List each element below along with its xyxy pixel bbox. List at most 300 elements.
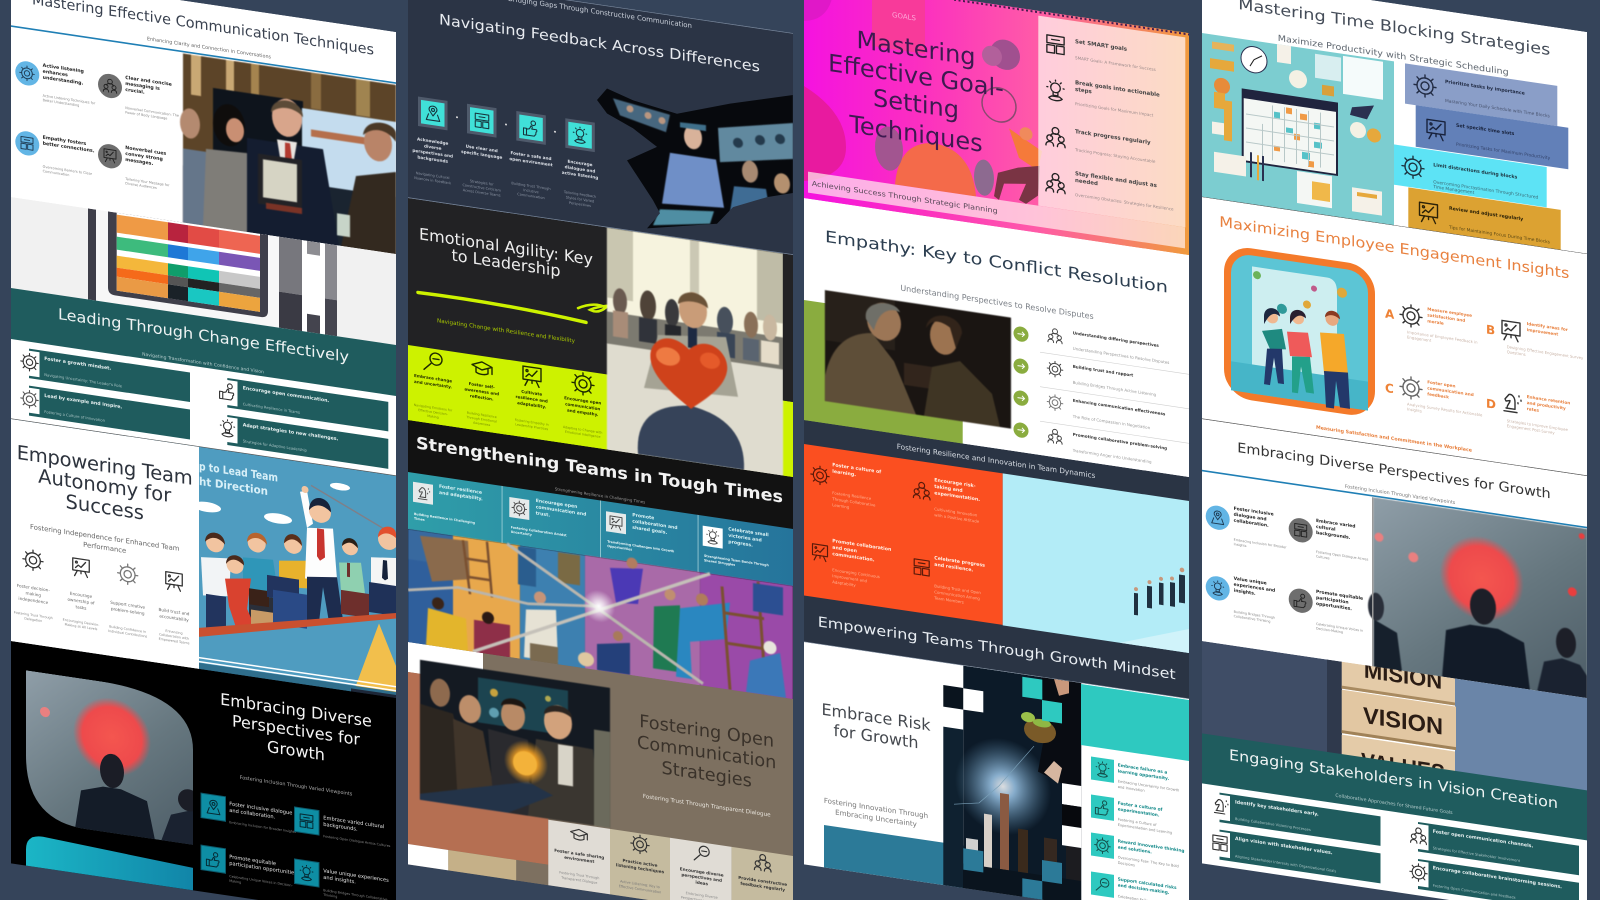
item: collaboration: Adaptability bbox=[832, 579, 856, 588]
list row: trust and rapport: Building Bridges Through Active Listening bbox=[1073, 380, 1157, 397]
subtitle: embrace risk: Fostering Innovation Through bbox=[824, 796, 928, 820]
item: self-awareness: Building Resilience bbox=[467, 411, 497, 419]
tip: communication: Fostering Collaboration Amidst bbox=[511, 525, 567, 538]
item: self-awareness: reflection. bbox=[470, 393, 494, 402]
item: decision making: Delegation bbox=[24, 616, 42, 623]
card: lead by example: Fostering a Culture of Innovation bbox=[44, 410, 106, 423]
item: trust and accountability: Enhancing bbox=[165, 629, 183, 635]
item: risk-taking: Cultivating Innovation bbox=[934, 506, 978, 518]
photo: businessperson, plant and city of coins bbox=[943, 663, 1081, 900]
item: culture of learning bbox=[811, 459, 882, 515]
tip: communication: trust. bbox=[536, 511, 550, 519]
item: trust and accountability bbox=[159, 571, 190, 645]
photo: award handover bbox=[180, 53, 396, 255]
list row: communication effectiveness: The Role of Compassion in Negotiation bbox=[1072, 414, 1151, 430]
item: cultural backgrounds: backgrounds. bbox=[323, 822, 358, 833]
subtitle: communication: Enhancing Clarity and Connection in Conversations bbox=[147, 36, 272, 61]
illustration: goal-setting scene bbox=[804, 0, 1042, 216]
slide: Embrace Risk for Growth bbox=[804, 642, 1189, 900]
item: unique experiences light: experiences and bbox=[1234, 582, 1275, 594]
item: varied backgrounds light: Cultures bbox=[1316, 554, 1330, 560]
item: trust and accountability: Build trust and bbox=[159, 607, 190, 616]
slide: Mastering Time Blocking Strategies bbox=[1202, 0, 1587, 255]
item: equitable participation light bbox=[1289, 585, 1363, 637]
step: dialogue: Encourage bbox=[568, 159, 593, 167]
list row: trust and rapport: Building trust and rapport bbox=[1073, 364, 1133, 378]
item: track progress: Track progress regularly bbox=[1075, 129, 1151, 146]
item: clear messaging: messaging is bbox=[125, 81, 160, 92]
item: track progress bbox=[1046, 125, 1156, 164]
card: growth mindset: Navigating Uncertainty: The Leader's Role bbox=[44, 373, 123, 389]
item: unique experiences bbox=[294, 859, 389, 900]
card: communication channels: Strategies for Effective Stakeholder Involvement bbox=[1433, 846, 1521, 863]
item: risk-taking: taking and bbox=[934, 484, 963, 494]
title: engaging stakeholders: Engaging Stakeholders in Vision Creation bbox=[1229, 747, 1558, 812]
card: brainstorming: Encourage collaborative brainstorming sessions. bbox=[1433, 865, 1562, 890]
item: culture of experimentation: experimentation. bbox=[1118, 806, 1160, 819]
item D: retention: Engagement Post-Survey bbox=[1507, 423, 1555, 435]
step: clear language bbox=[461, 103, 502, 198]
panel: active listening: Practice active bbox=[622, 858, 658, 868]
item: nonverbal cues: Tailoring Your Message for bbox=[124, 177, 170, 188]
item: embrace change: Effective Decision- bbox=[418, 408, 448, 416]
photo: man holding heart bbox=[607, 227, 783, 476]
panel: diverse perspectives: ideas bbox=[695, 880, 708, 886]
item: problem solving: problem-solving bbox=[111, 606, 145, 616]
subtitle: employee engagement: Measuring Satisfaction and Commitment in the Workplace bbox=[1316, 425, 1472, 454]
slide: Maximizing Employee Engagement Insights bbox=[1202, 197, 1587, 477]
tip: communication bbox=[509, 494, 586, 545]
item: unique experiences light bbox=[1206, 572, 1275, 624]
item: decision making: Fostering Trust Through bbox=[14, 610, 53, 620]
tip: celebrate bbox=[703, 523, 769, 572]
item: empathy: Overcoming Barriers to Clear bbox=[43, 165, 93, 176]
bar: limit distractions: Overcoming Procrastination Through Structured bbox=[1433, 179, 1539, 201]
item: stay flexible: Overcoming Obstacles: Strategies for Resilience bbox=[1075, 192, 1174, 212]
card: adapt strategies: Strategies for Adaptive Leadership bbox=[243, 439, 308, 453]
item: embrace change bbox=[414, 350, 453, 422]
item D: retention: and productivity bbox=[1527, 400, 1566, 411]
image: small team on pale blue bbox=[1003, 473, 1189, 653]
item: inclusive dialogue light: collaboration. bbox=[1234, 518, 1269, 529]
item: stay flexible: Stay flexible and adjust as bbox=[1075, 171, 1158, 189]
slide: Empowering Team Autonomy for Success bbox=[11, 419, 398, 699]
panel: safe sharing bbox=[548, 820, 610, 895]
slide: Fostering Open Communication Strategies bbox=[408, 642, 794, 900]
white text panel bbox=[11, 419, 199, 670]
title: goal-setting: Mastering bbox=[856, 26, 976, 71]
item B: improvement: Designing Effective Engagement Survey bbox=[1507, 344, 1584, 361]
item: empathy bbox=[15, 131, 94, 176]
item: unique experiences: Value unique experiences bbox=[323, 868, 389, 884]
item: problem solving bbox=[108, 561, 148, 639]
item: inclusive dialogue light bbox=[1206, 502, 1287, 554]
tip: celebrate: Strengthening Team Bonds Through bbox=[704, 554, 769, 567]
item: problem solving: Building Confidence in bbox=[109, 625, 146, 634]
item: unique experiences: Thinking bbox=[322, 893, 337, 899]
item C: communication bbox=[1385, 373, 1483, 423]
image: mission vision values blocks bbox=[1202, 634, 1587, 807]
slide: Mastering Effective Goal-Setting Techniques bbox=[804, 0, 1189, 256]
title: navigating feedback: Navigating Feedback Across Differences bbox=[439, 11, 760, 76]
card: lead by example bbox=[20, 384, 190, 439]
item: active listening: understanding. bbox=[43, 75, 83, 87]
bar: prioritize tasks: Mastering Your Daily Schedule with Time Blocks bbox=[1445, 98, 1551, 120]
item: participation: participation opportunities. bbox=[229, 861, 299, 877]
teal bar bbox=[26, 834, 193, 891]
item: ownership of tasks: Encouraging Decision- bbox=[63, 618, 100, 627]
item: equitable participation light: opportunities. bbox=[1316, 601, 1352, 612]
brush stroke and arrow bbox=[418, 270, 634, 329]
item: open communication: and empathy. bbox=[567, 408, 599, 417]
subtitle: leading through change: Navigating Transformation with Confidence and Vision bbox=[142, 351, 264, 375]
item: inclusive dialogue light: Foster inclusive bbox=[1234, 506, 1274, 518]
item: resilience: Cultivate bbox=[521, 389, 542, 397]
list row: differing perspectives bbox=[1014, 322, 1169, 365]
item: decision making bbox=[14, 547, 53, 625]
item: decision making: Foster decision- bbox=[17, 583, 50, 593]
card: lead by example: Lead by example and inspire. bbox=[44, 393, 122, 410]
slide: Emotional Agility: Key to Leadership bbox=[408, 198, 793, 478]
card: adapt strategies bbox=[218, 414, 388, 469]
subtitle: team autonomy: Performance bbox=[83, 541, 126, 555]
tip: resilience: Building Resilience in Challenging bbox=[414, 512, 476, 525]
title: team autonomy: Success bbox=[65, 490, 144, 525]
step: safe environment bbox=[509, 110, 553, 201]
photo: red glowing brain bbox=[26, 670, 200, 847]
item: culture of learning: Fostering Resilience bbox=[832, 490, 872, 501]
item: collaboration: Promote collaboration bbox=[832, 538, 891, 553]
photo: team around light bulb bbox=[420, 660, 610, 828]
item: inclusive dialogue bbox=[201, 793, 296, 834]
panel: active listening: listening techniques bbox=[616, 862, 665, 874]
bar: time slots bbox=[1416, 105, 1568, 169]
panel: constructive feedback bbox=[732, 847, 794, 900]
item: reward innovation: Reward innovative thinking bbox=[1118, 838, 1184, 854]
bar: review and adjust bbox=[1408, 187, 1561, 251]
illustration: people on ladders bbox=[408, 524, 793, 700]
image: mission vision values blocks: VISION bbox=[1363, 702, 1443, 740]
item: culture of experimentation: Foster a culture of bbox=[1118, 800, 1163, 813]
tip: communication: Encourage open bbox=[536, 498, 577, 510]
list row: communication effectiveness: Enhancing communication effectiveness bbox=[1073, 398, 1166, 417]
main man bbox=[305, 528, 337, 579]
step: clear language: Across Diverse Teams bbox=[463, 188, 501, 198]
card: growth mindset: Foster a growth mindset. bbox=[44, 356, 111, 372]
item: clear messaging: crucial. bbox=[125, 87, 145, 96]
bar: prioritize tasks bbox=[1405, 63, 1557, 126]
item C: communication: Insights bbox=[1407, 406, 1422, 414]
step: clear language: Constructive Criticism bbox=[463, 183, 501, 193]
item: empathy: Communication bbox=[43, 169, 69, 177]
platform bbox=[199, 613, 396, 637]
title: employee engagement: Maximizing Employee Engagement Insights bbox=[1219, 214, 1569, 282]
item: nonverbal cues: Diverse Audiences bbox=[125, 181, 157, 190]
step: acknowledge perspectives: Acknowledge bbox=[417, 136, 449, 146]
bar: review and adjust: Review and adjust regularly bbox=[1449, 206, 1523, 223]
item: self-awareness: awareness and bbox=[464, 386, 499, 396]
item: collaboration: Encouraging Continuous bbox=[832, 567, 880, 579]
item: varied backgrounds light: Fostering Open Dialogue Across bbox=[1316, 550, 1369, 562]
item A: satisfaction: morale bbox=[1427, 318, 1444, 326]
tip: collaboration bbox=[606, 508, 678, 558]
item: trust and accountability: accountability bbox=[159, 613, 189, 623]
item: ownership of tasks: tasks bbox=[75, 604, 87, 611]
panel: safe sharing: Foster a safe sharing bbox=[554, 848, 604, 860]
item: problem solving: Support creative bbox=[110, 600, 146, 610]
item: equitable participation light: Promote equitable bbox=[1316, 589, 1363, 602]
step: clear language: Strategies for bbox=[470, 179, 494, 187]
item B: improvement: Questions bbox=[1507, 349, 1526, 357]
item: risk-taking: Encourage risk- bbox=[934, 477, 976, 489]
item: reward innovation: and solutions. bbox=[1118, 844, 1152, 856]
item: SMART goals: SMART Goals: A Framework for Success bbox=[1075, 55, 1156, 72]
step: acknowledge perspectives: backgrounds bbox=[417, 154, 448, 164]
step: safe environment: open environment bbox=[509, 156, 553, 167]
item: collaboration: communication. bbox=[832, 551, 875, 563]
step: safe environment: Foster a safe and bbox=[510, 150, 552, 161]
item: clear messaging: Power of Body Language bbox=[125, 110, 167, 121]
card: open communication: Cultivating Resilience in Teams bbox=[243, 402, 300, 415]
item: culture of learning: Through Collaborative bbox=[831, 496, 876, 508]
subtitle: empathy: Understanding Perspectives to Resolve Disputes bbox=[900, 284, 1094, 321]
panel: active listening bbox=[610, 829, 670, 900]
step: dialogue bbox=[562, 118, 598, 209]
item B: improvement: improvement bbox=[1527, 327, 1558, 337]
item: resilience bbox=[515, 365, 549, 431]
tip: resilience: Times bbox=[414, 516, 425, 522]
item: actionable steps bbox=[1047, 76, 1160, 119]
column 1 of slides bbox=[11, 0, 398, 900]
item: varied backgrounds light bbox=[1289, 514, 1369, 566]
tip: collaboration: Promote bbox=[632, 512, 654, 521]
middle woman bbox=[1287, 330, 1312, 359]
teal strip of four tips bbox=[408, 472, 793, 586]
step: dialogue: active listening bbox=[562, 170, 598, 180]
item A: satisfaction bbox=[1385, 300, 1478, 350]
item: collaboration: and open bbox=[832, 545, 857, 554]
item: calculated risks: and decision-making. bbox=[1118, 882, 1170, 896]
item: celebrate progress: Building Trust and Open bbox=[934, 583, 981, 595]
item C: communication: Foster open bbox=[1427, 379, 1455, 389]
bar: time slots: Set specific time slots bbox=[1456, 123, 1514, 137]
item: self-awareness: Awareness bbox=[473, 421, 491, 427]
item: participation: Celebrating Unique Voices in Decision- bbox=[229, 874, 293, 888]
tip: communication: Uncertainty bbox=[511, 530, 533, 537]
strip bbox=[808, 172, 1185, 248]
item: nonverbal cues: messages. bbox=[125, 158, 153, 167]
item C: communication: feedback bbox=[1427, 391, 1449, 400]
slide: Engaging Stakeholders in Vision Creation bbox=[1202, 634, 1587, 900]
step: acknowledge perspectives: diverse bbox=[424, 143, 442, 151]
item: open communication: Encourage open bbox=[564, 395, 601, 406]
card: align vision bbox=[1210, 828, 1380, 883]
item: culture of experimentation: Experimentation and Learning bbox=[1118, 823, 1172, 835]
bar: limit distractions: Limit distractions during blocks bbox=[1433, 162, 1517, 181]
title: team autonomy: Autonomy for bbox=[38, 465, 172, 507]
bar: prioritize tasks: Prioritize tasks by importance bbox=[1445, 79, 1525, 97]
bar: time slots: Prioritizing Tasks for Maximum Productivity bbox=[1456, 142, 1551, 162]
bar: review and adjust: Tips for Maintaining Focus During Time Blocks bbox=[1448, 224, 1551, 246]
item: open communication: Emotional Intelligence bbox=[565, 430, 601, 439]
man orange bbox=[1320, 330, 1348, 377]
title: embracing diverse dark: Growth bbox=[267, 737, 325, 764]
tip: celebrate: victories and bbox=[728, 533, 762, 544]
item: self-awareness bbox=[464, 359, 499, 428]
card: growth mindset bbox=[20, 347, 190, 402]
item: track progress: Tracking Progress: Staying Accountable bbox=[1074, 147, 1156, 164]
item: celebrate progress: Communication Among bbox=[934, 589, 980, 601]
item D: retention: Strategies to Improve Employee bbox=[1507, 418, 1569, 432]
card: align vision: Aligning Stakeholder Interests with Organizational Goals bbox=[1235, 854, 1336, 873]
item: active listening: enhances bbox=[43, 69, 68, 78]
step: dialogue: Tailoring Feedback bbox=[563, 190, 597, 199]
item: trust and accountability: Empowered Teams bbox=[159, 637, 190, 645]
item: embrace change: Navigating Emotions for bbox=[414, 403, 453, 413]
item: decision making: independence bbox=[18, 596, 49, 605]
item: clear messaging: Nonverbal Communication: The bbox=[125, 106, 179, 118]
cartoon: team on boat: ht Direction bbox=[199, 475, 268, 498]
item: trust and accountability: Collaboration with bbox=[159, 632, 189, 641]
cartoon: team on boat: p to Lead Team bbox=[199, 460, 278, 484]
item: varied backgrounds light: backgrounds. bbox=[1316, 530, 1351, 541]
tip: celebrate: Celebrate small bbox=[728, 526, 769, 538]
item: participation bbox=[201, 845, 299, 893]
card: communication channels bbox=[1409, 821, 1579, 875]
image: mission vision values blocks: MISION bbox=[1364, 657, 1442, 694]
item: self-awareness: Foster self- bbox=[469, 381, 495, 390]
card: brainstorming bbox=[1409, 858, 1579, 900]
slide: Empathy: Key to Conflict Resolution bbox=[804, 198, 1189, 478]
tip: resilience: and adaptability. bbox=[439, 490, 483, 502]
tip: collaboration: Transforming Challenges into Growth bbox=[607, 540, 675, 554]
item: active listening: Active listening bbox=[43, 63, 84, 75]
item: embrace failure: learning opportunity. bbox=[1118, 768, 1169, 782]
illustration: goal-setting scene: GOALS bbox=[892, 10, 916, 23]
bar: limit distractions bbox=[1394, 144, 1547, 207]
item: active listening: Better Understanding bbox=[43, 98, 79, 108]
item: inclusive dialogue: and collaboration. bbox=[229, 808, 276, 821]
title: embrace risk: for Growth bbox=[834, 721, 918, 752]
card: key stakeholders: Building Collaborative Visioning Processes bbox=[1235, 817, 1311, 832]
column 3 of slides bbox=[804, 0, 1189, 900]
slide: Embracing Diverse Perspectives for Growth (light) bbox=[1202, 419, 1587, 699]
title: growth mindset: Empowering Teams Through Growth Mindset bbox=[818, 614, 1176, 683]
image: tablet with colour bars bbox=[11, 197, 396, 345]
item: nonverbal cues bbox=[98, 144, 170, 189]
subtitle: fostering open communication: Fostering Trust Through Transparent Dialogue bbox=[643, 794, 771, 819]
card: key stakeholders: Identify key stakeholders early. bbox=[1235, 799, 1319, 818]
panel: diverse perspectives: Embracing Diverse bbox=[686, 891, 718, 900]
title: leading through change: Leading Through Change Effectively bbox=[58, 305, 349, 366]
item: empathy: better connections. bbox=[43, 141, 95, 154]
item: varied backgrounds light: cultural bbox=[1316, 524, 1336, 533]
cartoon: team on boat bbox=[193, 459, 398, 699]
item B: improvement bbox=[1486, 315, 1584, 366]
photo: audience facing red brain bbox=[1368, 497, 1587, 699]
item: calculated risks: Support calculated risks bbox=[1118, 876, 1177, 891]
item: celebrate progress: Team Members bbox=[933, 595, 964, 605]
item A: satisfaction: Importance of Employee Feedback in bbox=[1407, 329, 1478, 345]
card: brainstorming: Fostering Open Communication and Feedback bbox=[1433, 884, 1517, 900]
step: dialogue: dialogue and bbox=[565, 164, 595, 174]
subtitle: emotional agility: Navigating Change with Resilience and Flexibility bbox=[437, 318, 576, 345]
item: participation: Promote equitable bbox=[229, 854, 276, 867]
item D: retention: Enhance retention bbox=[1527, 394, 1570, 405]
item: equitable participation light: Celebrating Unique Voices in bbox=[1316, 622, 1363, 633]
item B: improvement: B bbox=[1486, 322, 1495, 338]
item: clear messaging bbox=[98, 71, 179, 122]
item: varied backgrounds light: Embrace varied bbox=[1316, 518, 1355, 530]
subtitle: goal-setting: Achieving Success Through Strategic Planning bbox=[812, 179, 998, 215]
item C: communication: communication and bbox=[1427, 385, 1474, 397]
title: fostering open communication: Strategies bbox=[662, 758, 752, 792]
item: celebrate progress: and resilience. bbox=[934, 562, 973, 574]
step: acknowledge perspectives: Navigating Cultural bbox=[416, 171, 450, 180]
subtitle: embracing diverse dark: Fostering Inclusion Through Varied Viewpoints bbox=[240, 775, 353, 798]
step: clear language: Use clear and bbox=[466, 144, 498, 153]
item A: satisfaction: Measure employee bbox=[1427, 306, 1472, 318]
step: dialogue: Styles for Varied bbox=[566, 195, 594, 204]
item: culture of learning: Foster a culture of bbox=[832, 462, 882, 476]
item: embrace failure: Embrace failure as a bbox=[1118, 762, 1167, 776]
item: embrace failure bbox=[1091, 756, 1179, 798]
card: open communication bbox=[218, 377, 388, 431]
item: active listening bbox=[15, 59, 96, 110]
item: risk-taking: with a Positive Attitude bbox=[934, 512, 980, 524]
item: reward innovation: Decisions bbox=[1118, 861, 1135, 867]
step: safe environment: Inclusive bbox=[523, 188, 539, 194]
tip: collaboration: shared goals. bbox=[632, 525, 667, 536]
item: decision making: making bbox=[26, 590, 41, 598]
card: open communication: Encourage open communication. bbox=[243, 385, 329, 404]
list row: trust and rapport bbox=[1014, 355, 1157, 397]
title: embracing diverse light: Embracing Diverse Perspectives for Growth bbox=[1237, 440, 1551, 502]
item: unique experiences light: Building Bridges Through bbox=[1234, 610, 1275, 620]
man teal bbox=[243, 558, 276, 598]
item: nonverbal cues: convey strong bbox=[125, 151, 163, 162]
lime band bbox=[408, 345, 793, 478]
item: equitable participation light: participation bbox=[1316, 595, 1349, 606]
list row: communication effectiveness bbox=[1014, 389, 1166, 433]
item: equitable participation light: Decision-Making bbox=[1316, 626, 1343, 634]
subtitle: team autonomy: Fostering Independence for Enhanced Team bbox=[30, 523, 180, 553]
item: participation: Making bbox=[229, 879, 241, 885]
step: acknowledge perspectives: Nuances in Feedback bbox=[414, 176, 452, 186]
item: open communication: communication bbox=[565, 401, 600, 411]
slide: Mastering Effective Communication Techniques bbox=[11, 0, 396, 255]
item D: retention bbox=[1486, 388, 1570, 437]
teal title band bbox=[1202, 733, 1587, 840]
item: celebrate progress: Celebrate progress bbox=[934, 555, 985, 569]
item: cultural backgrounds: Fostering Open Dialogue Across Cultures bbox=[323, 834, 391, 848]
slide: Empowering Teams Through Growth Mindset bbox=[804, 420, 1189, 700]
item: resilience: Leadership Practices bbox=[515, 422, 548, 431]
panel: safe sharing: Transparent Dialogue bbox=[560, 876, 597, 885]
teal panel bbox=[1081, 684, 1189, 761]
item: calculated risks bbox=[1091, 871, 1177, 900]
orange panel bbox=[804, 444, 1003, 625]
right panel bbox=[1038, 16, 1185, 227]
tip: collaboration: Opportunities bbox=[607, 544, 632, 552]
item: open communication: Adapting to Change with bbox=[563, 425, 602, 435]
item: inclusive dialogue: Foster inclusive dialogue bbox=[229, 801, 292, 817]
column 4 of slides bbox=[1202, 0, 1587, 900]
panel: active listening: Active Listening: Key to bbox=[620, 879, 660, 889]
panel: safe sharing: Fostering Trust Through bbox=[559, 870, 599, 880]
item: ownership of tasks bbox=[63, 556, 100, 632]
item D: retention: D bbox=[1486, 396, 1496, 412]
